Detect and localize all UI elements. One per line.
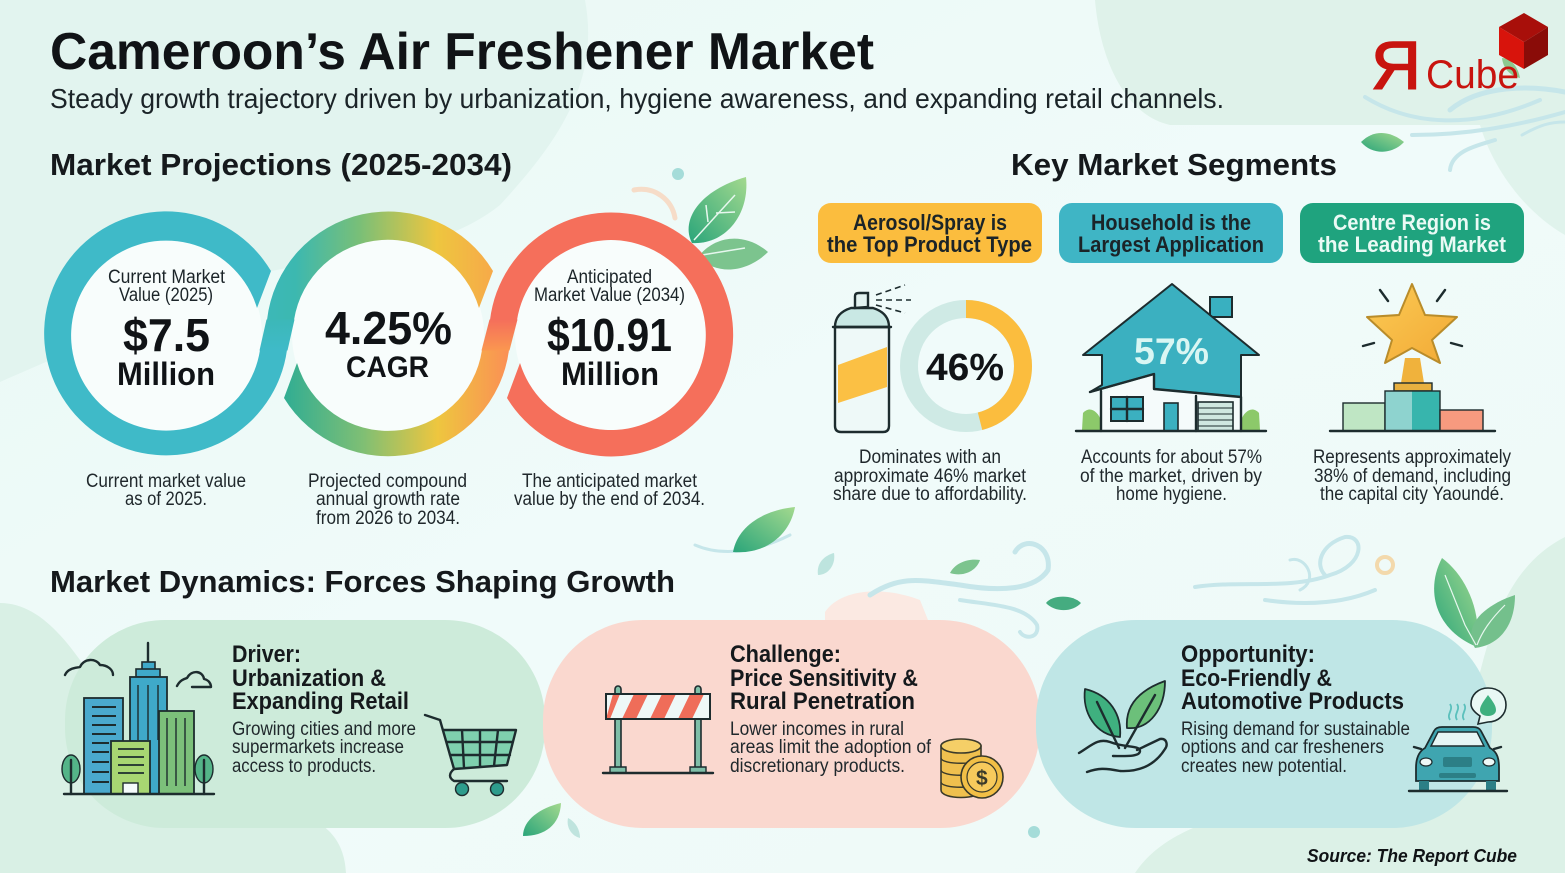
text: centre region description: 38% of demand, including — [1314, 466, 1511, 487]
segment: household pill: Largest Application — [1078, 232, 1264, 257]
text: opportunity: creates new potential. — [1181, 756, 1347, 777]
segment: household pill: Household is the — [1091, 210, 1251, 235]
panel: challenge — [543, 620, 1040, 828]
text: ring description 3: The anticipated market — [522, 471, 698, 492]
text: challenge — [730, 641, 932, 777]
icon: house with 57%: 57% — [1134, 331, 1209, 372]
icon: star trophy on podium — [1330, 284, 1495, 431]
segment: household pill — [1059, 203, 1283, 263]
text: household description — [1080, 447, 1262, 505]
subtitle: Steady growth trajectory driven by urbanization, hygiene awareness, and expanding retail channels. — [50, 83, 1224, 114]
logo — [1371, 13, 1548, 104]
text: opportunity: options and car fresheners — [1181, 737, 1384, 758]
heading: key market segments: Key Market Segments — [1011, 147, 1337, 182]
text: ring description 1: as of 2025. — [125, 489, 207, 510]
icon: car with scent bubble — [1409, 688, 1507, 791]
text: opportunity: Rising demand for sustainable — [1181, 719, 1410, 740]
ring: CAGR lower arc — [284, 350, 509, 456]
segment: centre region pill: the Leading Market — [1318, 232, 1507, 257]
text: ring description 3: value by the end of 2034. — [514, 489, 705, 510]
text: anticipated value: Market Value (2034) — [534, 285, 685, 306]
text: current value — [108, 267, 226, 392]
panel: market projection rings — [44, 211, 733, 529]
icon: small leaf top right — [1361, 133, 1404, 152]
icon: decorative leaves mid — [733, 507, 1515, 648]
text: aerosol description: share due to affordability. — [833, 484, 1027, 505]
text: current value: $7.5 — [123, 309, 210, 361]
text: ring description 3 — [514, 471, 705, 510]
text: challenge: Rural Penetration — [730, 688, 915, 715]
text: driver: Driver: — [232, 641, 301, 668]
text: ring description 2: annual growth rate — [316, 489, 460, 510]
text: current value: Current Market — [108, 267, 226, 288]
icon: spray can — [833, 285, 911, 432]
text: opportunity: Opportunity: — [1181, 641, 1315, 668]
text: challenge: discretionary products. — [730, 756, 905, 777]
segment: aerosol pill: Aerosol/Spray is — [853, 210, 1007, 235]
text: centre region description: Represents approximately — [1313, 447, 1511, 468]
icon: shopping cart — [425, 715, 516, 796]
text: ring description 2 — [308, 471, 467, 529]
chart: 46% donut — [909, 309, 1023, 423]
icon: plant in hand — [1079, 681, 1167, 772]
text: CAGR: CAGR — [346, 351, 429, 384]
segment: aerosol pill: the Top Product Type — [827, 232, 1032, 257]
icon: road barrier — [603, 686, 713, 773]
icon: city skyline — [62, 643, 214, 794]
joint: first S-curve — [260, 320, 294, 350]
segment: aerosol pill — [818, 203, 1042, 263]
text: driver — [232, 641, 416, 777]
text: anticipated value — [534, 267, 685, 392]
source note: Source: The Report Cube — [1307, 846, 1517, 866]
title: Cameroon’s Air Freshener Market — [50, 23, 874, 81]
text: CAGR — [325, 302, 452, 384]
text: ring description 1: Current market value — [86, 471, 246, 492]
icon: house with 57% — [1076, 284, 1266, 431]
text: driver: Urbanization & — [232, 665, 386, 692]
logo: Я — [1371, 28, 1421, 104]
ring: current market value — [44, 211, 287, 455]
text: anticipated value: Million — [561, 356, 659, 392]
heading: market dynamics: Market Dynamics: Forces Shaping Growth — [50, 564, 675, 599]
panel: opportunity — [1036, 620, 1507, 828]
text: centre region description: the capital city Yaoundé. — [1320, 484, 1504, 505]
text: centre region description — [1313, 447, 1511, 505]
text: aerosol description — [833, 447, 1027, 505]
heading: market projections: Market Projections (2025-2034) — [50, 147, 512, 182]
ring: CAGR upper arc — [267, 212, 493, 320]
text: driver: Expanding Retail — [232, 688, 409, 715]
text: ring description 2: from 2026 to 2034. — [316, 508, 460, 529]
panel: key market segments — [818, 203, 1524, 505]
icon: leaves by rings — [689, 177, 768, 270]
text: household description: home hygiene. — [1116, 484, 1227, 505]
logo: Cube — [1426, 53, 1519, 97]
text: challenge: Price Sensitivity & — [730, 665, 918, 692]
text: ring description 2: Projected compound — [308, 471, 467, 492]
text: opportunity — [1181, 641, 1410, 777]
segment: centre region pill: Centre Region is — [1333, 210, 1491, 235]
text: ring description 1 — [86, 471, 246, 510]
ring: anticipated market value — [490, 212, 733, 456]
text: challenge: Lower incomes in rural — [730, 719, 904, 740]
panel: driver — [62, 620, 545, 828]
text: opportunity: Automotive Products — [1181, 688, 1404, 715]
text: opportunity: Eco-Friendly & — [1181, 665, 1332, 692]
text: aerosol description: Dominates with an — [859, 447, 1001, 468]
text: current value: Value (2025) — [119, 285, 213, 306]
icon: coins: $ — [976, 767, 988, 790]
icon: small leaves bottom — [523, 803, 580, 838]
text: driver: access to products. — [232, 756, 376, 777]
text: challenge: Challenge: — [730, 641, 841, 668]
text: household description: of the market, driven by — [1080, 466, 1262, 487]
text: driver: Growing cities and more — [232, 719, 416, 740]
segment: centre region pill — [1300, 203, 1524, 263]
joint: second S-curve — [482, 320, 518, 350]
text: CAGR: 4.25% — [325, 302, 452, 354]
text: anticipated value: $10.91 — [547, 309, 672, 361]
text: driver: supermarkets increase — [232, 737, 404, 758]
text: challenge: areas limit the adoption of — [730, 737, 932, 758]
text: household description: Accounts for about 57% — [1081, 447, 1262, 468]
text: anticipated value: Anticipated — [567, 267, 652, 288]
chart: 46% donut: 46% — [926, 347, 1004, 389]
icon: coins — [941, 739, 1003, 798]
text: current value: Million — [117, 356, 215, 392]
text: aerosol description: approximate 46% market — [834, 466, 1027, 487]
